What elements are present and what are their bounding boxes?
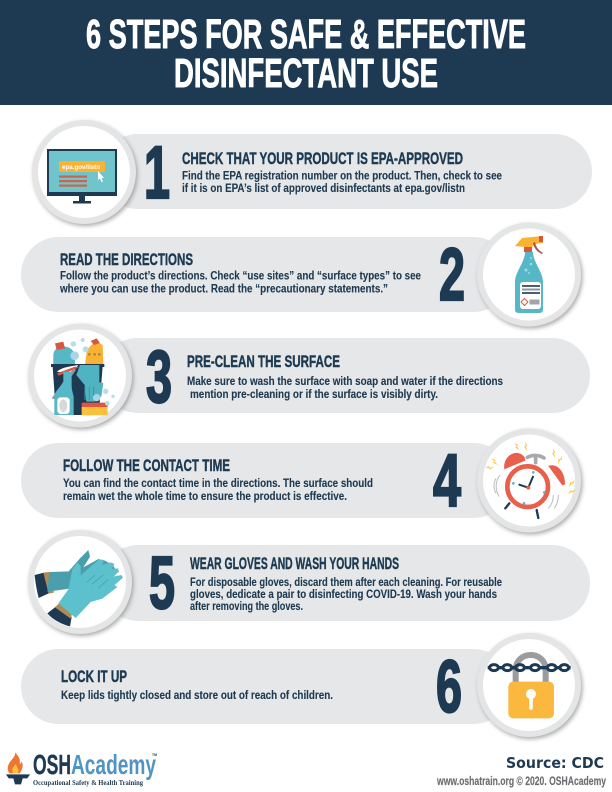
body text: mention pre-cleaning or if the surface is visibly dirty. bbox=[190, 389, 438, 401]
heading: READ THE DIRECTIONS bbox=[60, 251, 193, 269]
body text: For disposable gloves, discard them after each cleaning. For reusable bbox=[190, 577, 502, 589]
wordmark: OSH bbox=[33, 749, 71, 780]
tagline: Occupational Safety & Health Training bbox=[33, 779, 143, 787]
step number 1: 1 bbox=[144, 131, 170, 214]
body text bbox=[63, 478, 373, 503]
panel: step 4 bbox=[21, 428, 582, 534]
heading: FOLLOW THE CONTACT TIME bbox=[63, 457, 230, 475]
wordmark bbox=[33, 749, 157, 780]
icon: cleaning supplies bucket bbox=[28, 324, 134, 430]
icon: computer monitor bbox=[32, 120, 138, 226]
pill background bbox=[21, 443, 511, 518]
header banner bbox=[0, 0, 612, 105]
body text: gloves, dedicate a pair to disinfecting COVID-19. Wash your hands bbox=[190, 589, 497, 601]
body text bbox=[59, 270, 421, 296]
body text bbox=[187, 376, 503, 401]
heading: CHECK THAT YOUR PRODUCT IS EPA-APPROVED bbox=[182, 150, 463, 168]
icon: spray bottle bbox=[477, 222, 582, 328]
icon: flame bbox=[6, 752, 30, 784]
icon: alarm clock bbox=[477, 428, 582, 534]
step number 3: 3 bbox=[146, 335, 172, 418]
step number 4: 4 bbox=[433, 439, 461, 522]
panel: step 2 bbox=[21, 222, 582, 328]
body text bbox=[190, 577, 502, 613]
body text: after removing the gloves. bbox=[190, 601, 303, 613]
wordmark: Academy bbox=[71, 749, 156, 780]
step number 6: 6 bbox=[436, 645, 462, 728]
body text: You can find the contact time in the directions. The surface should bbox=[63, 478, 373, 490]
pill background bbox=[100, 545, 590, 621]
heading: WEAR GLOVES AND WASH YOUR HANDS bbox=[190, 555, 399, 573]
body text: Find the EPA registration number on the product. Then, check to see bbox=[182, 170, 502, 182]
icon: gloved hands bbox=[28, 530, 134, 636]
title bbox=[86, 11, 526, 96]
footer: OSHAcademy logo bbox=[6, 749, 157, 787]
pill background bbox=[100, 134, 592, 209]
step number 2: 2 bbox=[439, 233, 465, 316]
body text: where you can use the product. Read the “precautionary statements.” bbox=[59, 284, 388, 296]
wordmark: TM bbox=[152, 753, 157, 757]
icon: computer monitor: epa.gov/listn bbox=[62, 164, 100, 171]
body text: if it is on EPA’s list of approved disinfectants at epa.gov/listn bbox=[182, 183, 465, 195]
heading: PRE-CLEAN THE SURFACE bbox=[187, 353, 340, 371]
body text: Make sure to wash the surface with soap and water if the directions bbox=[187, 376, 503, 388]
panel: step 6 bbox=[21, 633, 582, 739]
body text: Follow the product’s directions. Check “use sites” and “surface types” to see bbox=[60, 270, 421, 282]
pill background bbox=[100, 338, 590, 413]
panel: step 1 bbox=[32, 120, 592, 226]
panel: step 5 bbox=[28, 530, 590, 636]
step number 5: 5 bbox=[149, 542, 175, 624]
body text bbox=[182, 170, 502, 195]
source credit: Source: CDC bbox=[506, 754, 604, 772]
pill background bbox=[21, 237, 511, 312]
body text: remain wet the whole time to ensure the product is effective. bbox=[63, 491, 347, 503]
icon: chained padlock bbox=[477, 633, 582, 739]
body text: Keep lids tightly closed and store out of reach of children. bbox=[61, 690, 333, 702]
panel: step 3 bbox=[28, 324, 590, 430]
title: DISINFECTANT USE bbox=[174, 50, 438, 96]
pill background bbox=[21, 649, 511, 724]
heading: LOCK IT UP bbox=[61, 668, 127, 686]
